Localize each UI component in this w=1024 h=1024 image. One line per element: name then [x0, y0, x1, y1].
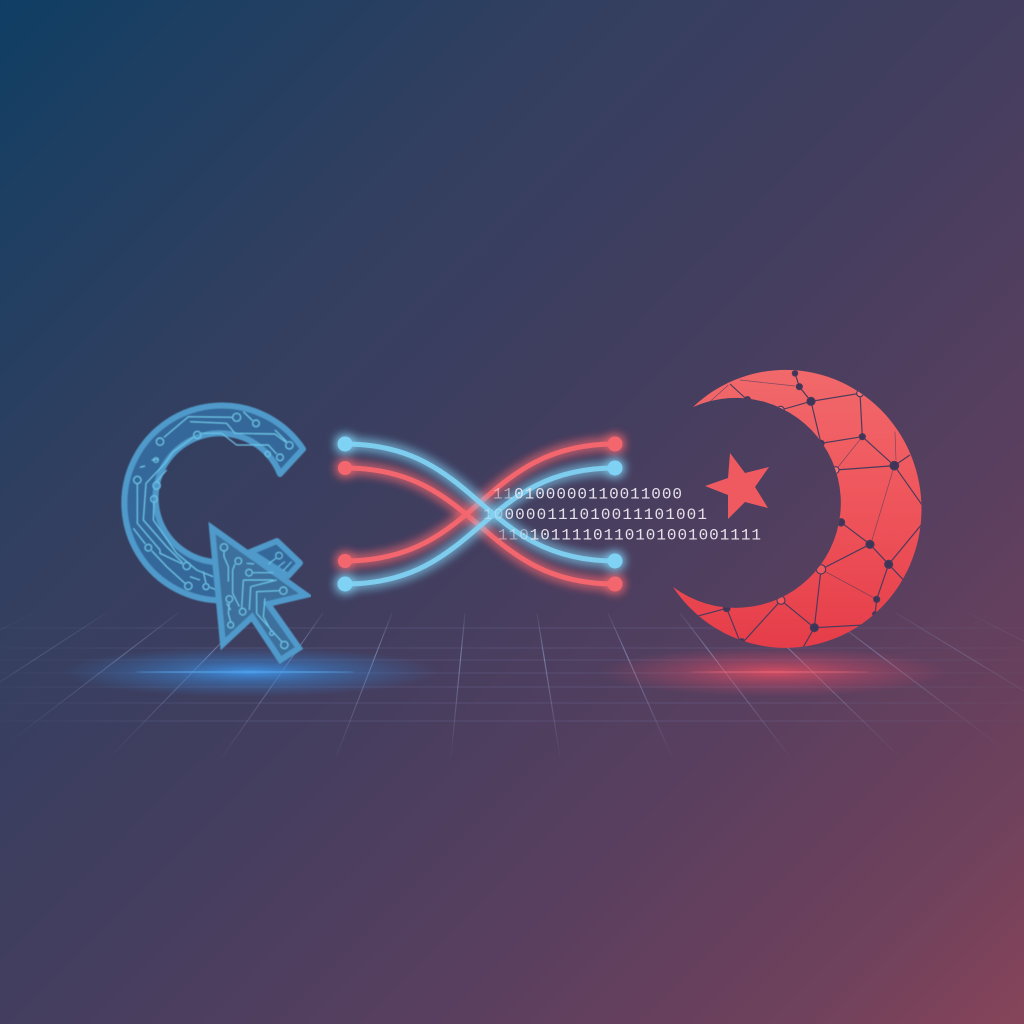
- circuit traces on cursor: [220, 544, 292, 649]
- perspective floor grid: [0, 613, 1024, 760]
- circuit traces on C: [133, 412, 293, 590]
- binary data text: 110100000110011000: [493, 486, 682, 504]
- binary data text: 1101011110110101001001111: [498, 526, 761, 544]
- blue wires: [338, 436, 622, 592]
- icon: network crescent: [673, 370, 923, 650]
- binary data text: [483, 486, 761, 544]
- crossing data wires: [338, 436, 622, 592]
- icon: circuit cursor arrow: [212, 528, 306, 660]
- blue floor glow: [60, 647, 440, 697]
- icon: circuit letter C: [124, 406, 303, 601]
- crescent network mesh: [698, 371, 923, 650]
- icon: star: [705, 453, 769, 519]
- binary data text: 100000111010011101001: [483, 506, 707, 524]
- red wires: [338, 436, 622, 592]
- red floor glow: [600, 647, 950, 697]
